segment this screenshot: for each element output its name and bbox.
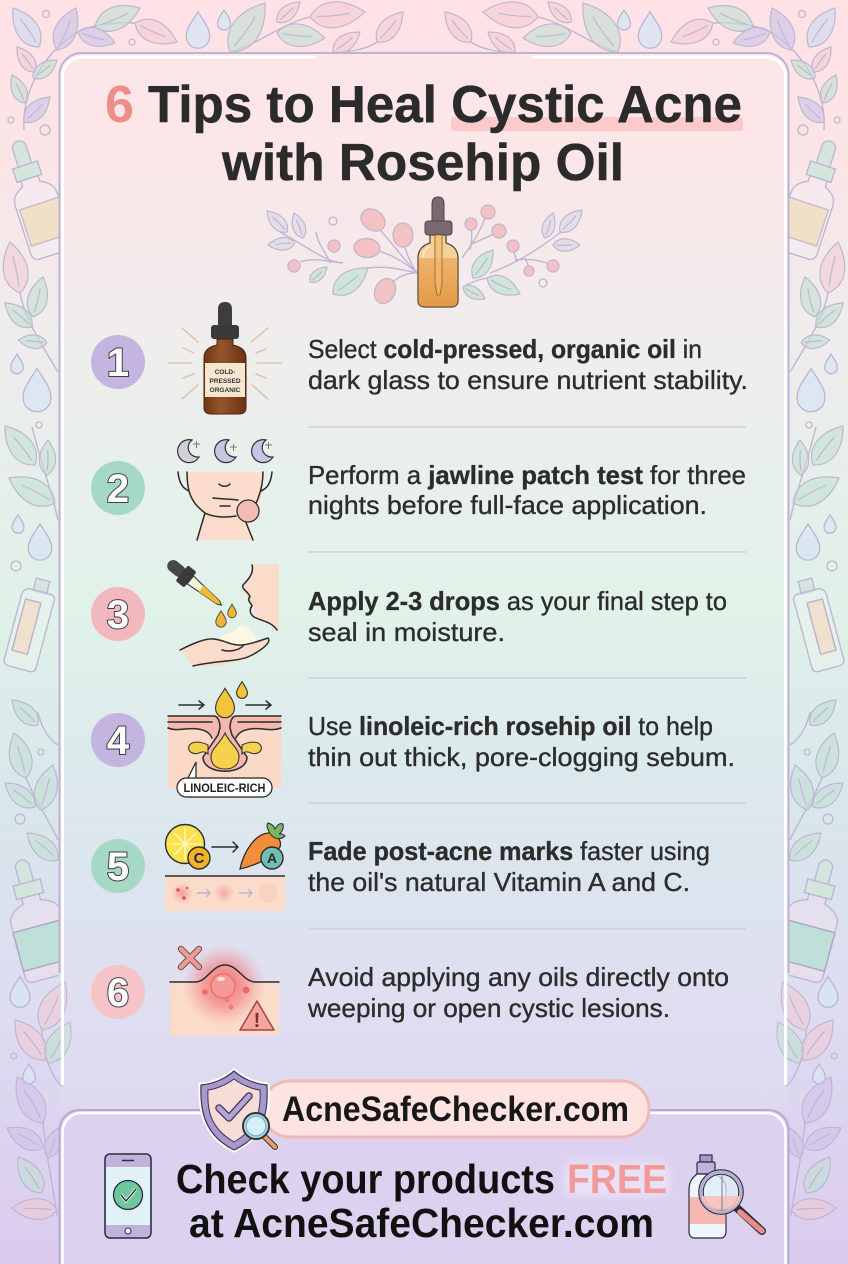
tip 3 text (308, 586, 727, 647)
icon: vitamins fade marks (165, 823, 285, 911)
website pill (262, 1081, 649, 1137)
icon: phone with check (105, 1154, 151, 1238)
tip 5 text: the oil's natural Vitamin A and C. (308, 867, 690, 897)
tip 2 text: Perform a jawline patch test for three (308, 460, 746, 490)
tip 2 text (308, 460, 746, 520)
tip 4 text (308, 711, 735, 772)
icon: avoid open lesions (170, 943, 279, 1035)
tip 5 text: Fade post-acne marks faster using (308, 836, 710, 866)
number badge 3: 3 (107, 593, 129, 637)
icon: cold-pressed bottle: ORGANIC (210, 387, 241, 394)
rosehip sprig right (460, 205, 587, 304)
tip 6 text (307, 962, 729, 1023)
icon: cold-pressed bottle: PRESSED (209, 378, 241, 385)
title line one: Tips to Heal Cystic Acne (148, 76, 742, 134)
cta line one: Check your products (176, 1156, 555, 1202)
icon: linoleic oil in pore (168, 682, 281, 797)
decorative bottle bottom (0, 854, 77, 984)
number badge 5 (91, 839, 145, 893)
left floral border (0, 0, 410, 1220)
tip 6 text: Avoid applying any oils directly onto (308, 962, 729, 992)
number badge 2 (91, 461, 145, 515)
number badge 6 (91, 965, 145, 1019)
amber oil bottle (418, 197, 458, 307)
number badge 2: 2 (107, 467, 129, 511)
icon: avoid open lesions: ! (254, 1010, 260, 1032)
tip 4 text: thin out thick, pore-clogging sebum. (308, 742, 735, 772)
tip 2 (91, 440, 746, 540)
tip 3 (91, 554, 727, 666)
icon: shield with check and magnifier (201, 1071, 275, 1150)
check your products text (176, 1156, 669, 1246)
icon: cold-pressed bottle (168, 302, 282, 414)
icon: vitamins fade marks: C (194, 850, 205, 867)
hero illustration: rosehip sprigs and oil bottle (262, 197, 587, 307)
number badge 1 (91, 335, 145, 389)
tip 1 text: Select cold-pressed, organic oil in (308, 334, 702, 364)
title line two: with Rosehip Oil (221, 134, 624, 192)
tip 1 text (308, 334, 748, 395)
number badge 6: 6 (107, 971, 129, 1015)
main panel (60, 53, 788, 1110)
website pill: AcneSafeChecker.com (282, 1090, 629, 1129)
tip 1 (91, 302, 748, 414)
tip 4 (91, 682, 735, 797)
title highlight (451, 117, 743, 131)
icon: vitamins fade marks: A (267, 850, 277, 866)
tip 5 (91, 823, 710, 911)
number badge 1: 1 (107, 341, 129, 385)
icon: cold-pressed bottle: COLD- (215, 369, 235, 376)
title number: 6 (105, 76, 134, 134)
tip 6 (91, 943, 729, 1035)
number badge 5: 5 (107, 845, 129, 889)
number badge 4 (91, 713, 145, 767)
number badge 4: 4 (107, 719, 130, 763)
icon: jawline patch test (178, 440, 273, 540)
cta line two: at AcneSafeChecker.com (189, 1200, 654, 1246)
tip 3 text: Apply 2-3 drops as your final step to (308, 586, 727, 616)
rosehip sprig left (262, 204, 417, 307)
tip 6 text: weeping or open cystic lesions. (307, 993, 670, 1023)
icon: product bottle with magnifier (689, 1155, 762, 1238)
tip 1 text: dark glass to ensure nutrient stability. (308, 365, 748, 395)
footer panel (60, 1110, 788, 1264)
decorative bottle top (0, 134, 75, 261)
tip 4 text: Use linoleic-rich rosehip oil to help (308, 711, 713, 741)
icon: applying drops (162, 554, 279, 666)
icon: linoleic oil in pore: LINOLEIC-RICH (184, 783, 266, 795)
right floral border (438, 0, 848, 1220)
free highlight: FREE (567, 1156, 667, 1202)
tip 5 text (308, 836, 710, 897)
tip 2 text: nights before full-face application. (308, 490, 707, 520)
tip 3 text: seal in moisture. (308, 617, 505, 647)
title (105, 76, 743, 192)
decorative bottle middle (3, 575, 59, 673)
number badge 3 (91, 587, 145, 641)
